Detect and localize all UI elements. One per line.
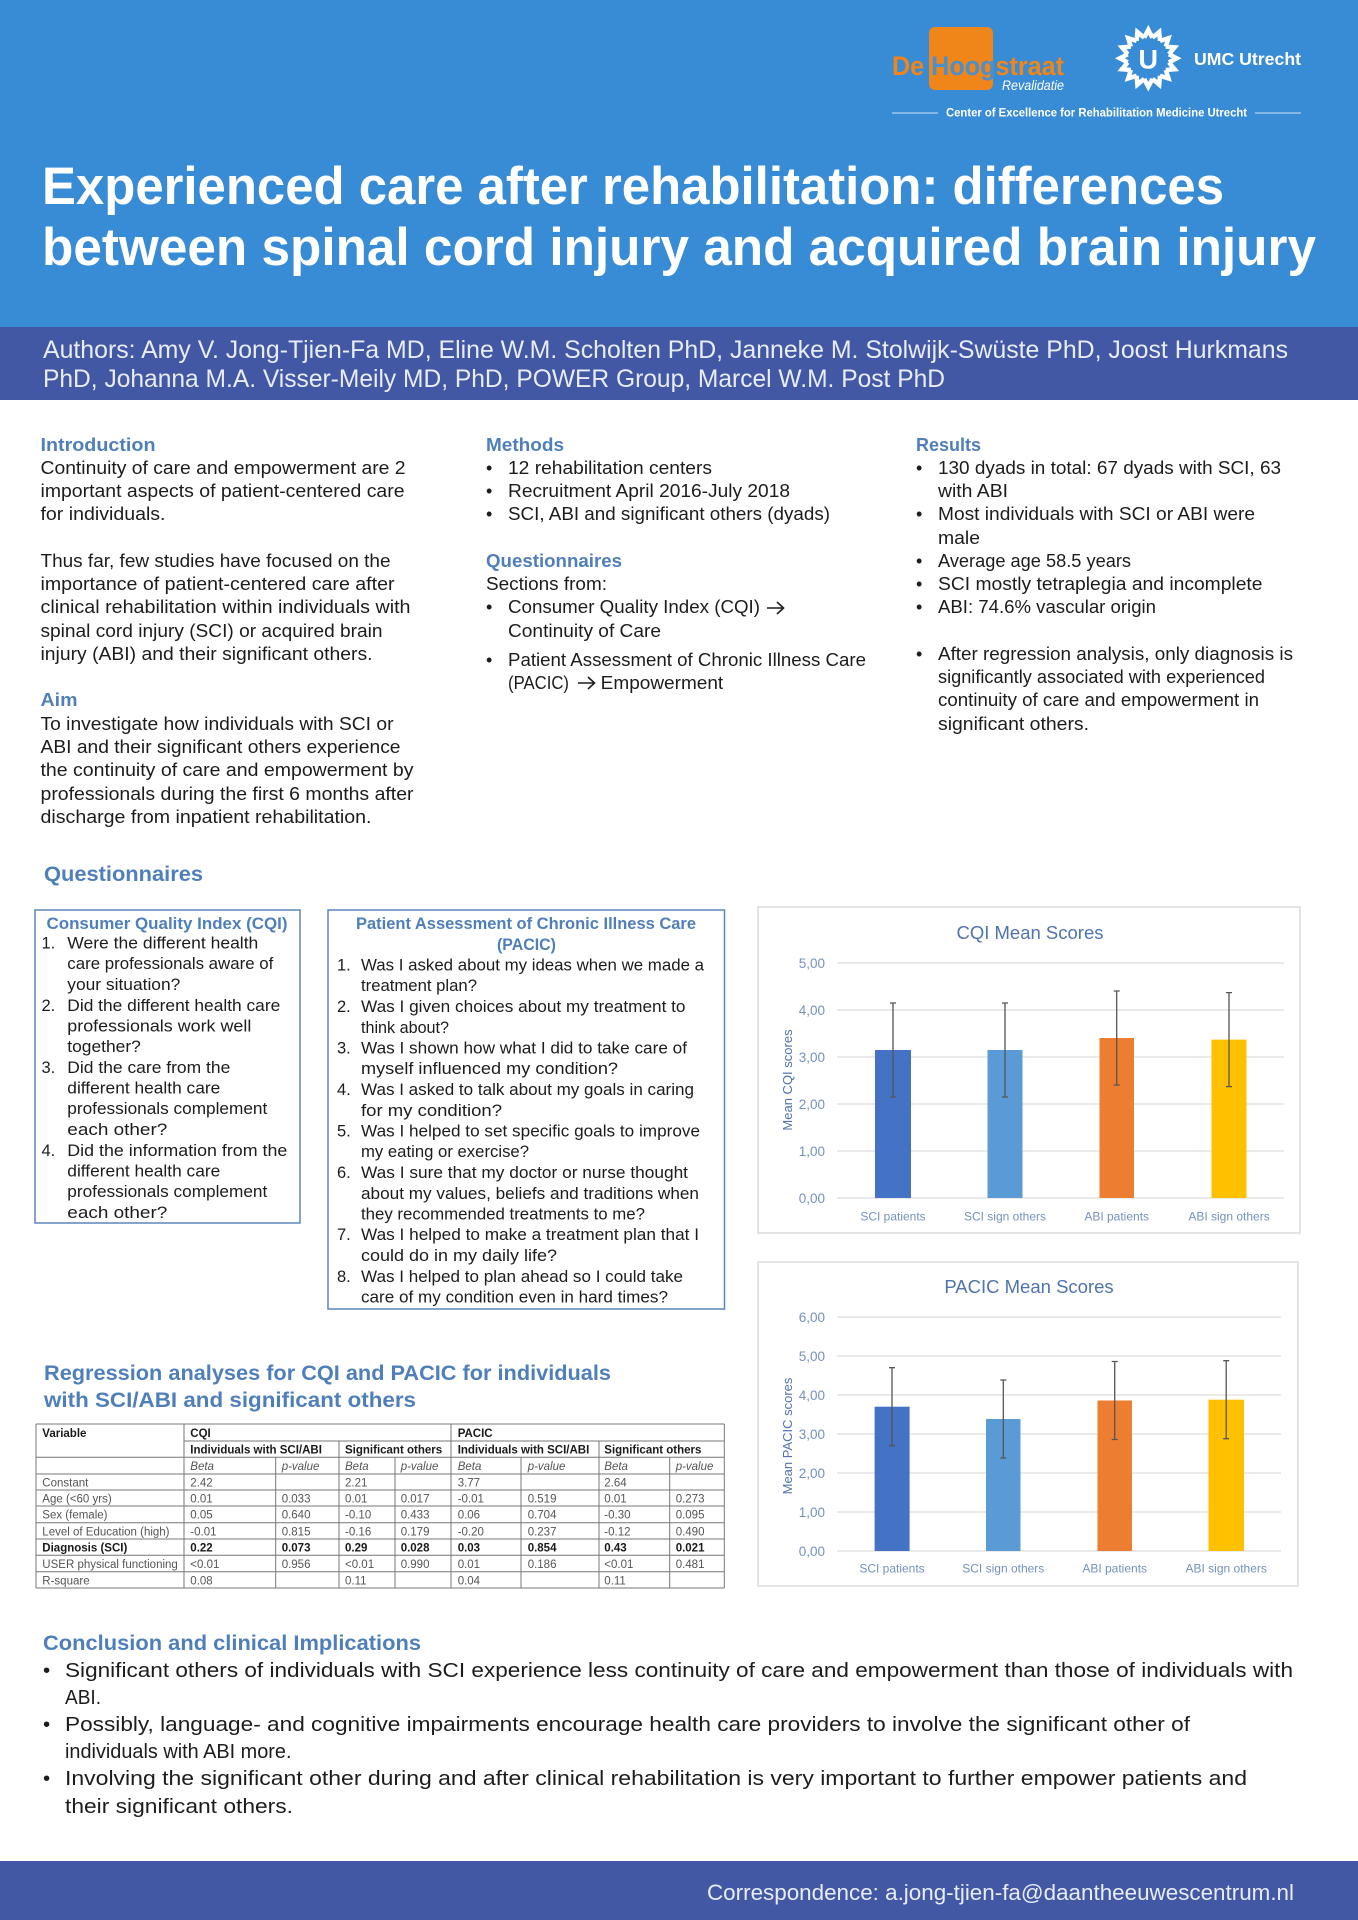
heading: CQI: Consumer Quality Index (CQI) <box>46 915 288 933</box>
chart: CQI mean scores: 1,00 <box>799 1144 825 1159</box>
chart: CQI mean scores: 5,00 <box>799 956 825 971</box>
table: regression results: p-value <box>527 1461 565 1473</box>
list: conclusions: individuals with ABI more. <box>65 1740 292 1763</box>
text: introduction: Thus far, few studies have focused on the <box>40 551 390 571</box>
list: PACIC items: 4. <box>337 1081 351 1099</box>
table: regression results: 2.64 <box>604 1477 627 1489</box>
list: PACIC items: 5. <box>337 1122 351 1140</box>
table: regression results: -0.10 <box>345 1510 371 1522</box>
list: methods: • <box>486 458 492 478</box>
table: regression results: R-square <box>42 1575 90 1587</box>
list: results <box>916 458 1293 734</box>
table: regression results: 0.481 <box>676 1559 704 1571</box>
table: regression results: 0.033 <box>282 1494 310 1506</box>
list: CQI items: 4. <box>42 1142 55 1160</box>
logo: De Hoogstraat: Revalidatie <box>1002 77 1064 93</box>
chart: CQI mean scores: CQI Mean Scores <box>956 922 1104 943</box>
table: regression results: p-value <box>675 1461 713 1473</box>
list: CQI items: each other? <box>67 1121 167 1139</box>
table: regression results: Age (<60 yrs) <box>42 1494 112 1506</box>
text: aim: ABI and their significant others experience <box>40 737 400 757</box>
heading: questionnaires section: Questionnaires <box>44 863 203 886</box>
list: conclusions <box>43 1659 1293 1818</box>
chart: PACIC mean scores: 4,00 <box>799 1388 825 1403</box>
list: CQI items: each other? <box>67 1204 167 1222</box>
chart: CQI mean scores: 0,00 <box>799 1191 825 1206</box>
list: results: • <box>916 458 922 478</box>
text: introduction: injury (ABI) and their significant others. <box>40 644 372 664</box>
list: methods: • <box>486 504 492 524</box>
list: PACIC items: Was I asked about my ideas when we made a <box>361 956 705 974</box>
list: CQI items: Did the different health care <box>67 997 280 1015</box>
heading: methods: Methods <box>486 435 564 455</box>
list: CQI items: different health care <box>67 1162 220 1180</box>
table: regression results: p-value <box>281 1461 319 1473</box>
chart: CQI mean scores: Mean CQI scores <box>780 1029 795 1131</box>
list: PACIC items: Was I sure that my doctor or nurse thought <box>361 1164 688 1182</box>
table: regression results: Variable <box>42 1428 86 1440</box>
table: regression results: 2.21 <box>345 1477 367 1489</box>
text: aim: the continuity of care and empowerment by <box>40 760 413 780</box>
chart: CQI mean scores: ABI sign others <box>1188 1210 1270 1224</box>
list: PACIC items: for my condition? <box>361 1102 502 1120</box>
table: regression results: 0.179 <box>401 1526 429 1538</box>
authors band: PhD, Johanna M.A. Visser-Meily MD, PhD, POWER Group, Marcel W.M. Post PhD <box>43 365 945 393</box>
table: regression results: 0.01 <box>604 1494 627 1506</box>
title: between spinal cord injury and acquired brain injury <box>42 218 1317 277</box>
table: regression results: -0.16 <box>345 1526 371 1538</box>
list: results: Most individuals with SCI or ABI were <box>938 504 1255 524</box>
table: regression results: 0.017 <box>401 1494 429 1506</box>
list: PACIC items: Was I asked to talk about my goals in caring <box>361 1081 694 1099</box>
list: results: significantly associated with experienced <box>938 667 1265 687</box>
table: regression results: 0.22 <box>190 1543 213 1555</box>
chart: PACIC mean scores: 2,00 <box>799 1466 825 1481</box>
list: CQI items: 1. <box>42 934 55 952</box>
logo: UMC Utrecht: U <box>1139 44 1158 74</box>
logo: UMC Utrecht <box>1120 30 1301 87</box>
heading: introduction: Introduction <box>40 435 156 455</box>
list: PACIC items: Was I shown how what I did to take care of <box>361 1040 687 1058</box>
list: CQI items: your situation? <box>67 976 180 994</box>
authors band <box>0 327 1358 400</box>
table: regression results: Individuals with SCI/ABI <box>458 1445 589 1457</box>
table: regression results: 0.490 <box>676 1526 704 1538</box>
table: regression results: 0.43 <box>604 1543 627 1555</box>
table: regression results: <0.01 <box>190 1559 219 1571</box>
panel: PACIC questions <box>328 910 724 1309</box>
list: questionnaire sections: • <box>486 597 492 617</box>
table: regression results: Diagnosis (SCI) <box>42 1543 127 1555</box>
text: introduction: spinal cord injury (SCI) or acquired brain <box>40 621 382 641</box>
table: regression results: Beta <box>458 1461 481 1473</box>
heading: PACIC: Patient Assessment of Chronic Illness Care <box>356 915 696 933</box>
panel: introduction and aim <box>40 435 414 827</box>
table: regression results: Beta <box>190 1461 214 1473</box>
list: PACIC items: think about? <box>361 1019 449 1037</box>
list: results: • <box>916 644 922 664</box>
text: introduction: clinical rehabilitation within individuals with <box>40 597 411 617</box>
text: aim <box>40 714 414 827</box>
table: regression results: Significant others <box>345 1445 442 1457</box>
table: regression results: CQI <box>190 1428 211 1440</box>
list: PACIC items: Was I helped to make a treatment plan that I <box>361 1226 699 1244</box>
list: questionnaire sections: Sections from: <box>486 574 607 594</box>
chart: PACIC mean scores: ABI patients <box>1082 1562 1147 1576</box>
table: regression results: <0.01 <box>604 1559 633 1571</box>
text: introduction: important aspects of patient-centered care <box>40 481 404 501</box>
chart: CQI mean scores <box>758 907 1300 1233</box>
list: CQI items <box>42 934 287 1222</box>
table: regression results: 0.06 <box>458 1510 480 1522</box>
chart: CQI mean scores: 2,00 <box>799 1097 825 1112</box>
list: PACIC items <box>337 956 705 1306</box>
heading: regression analyses <box>43 1362 611 1412</box>
list: PACIC items: 2. <box>337 998 351 1016</box>
list: PACIC items: Was I given choices about my treatment to <box>361 998 686 1016</box>
chart: CQI mean scores: SCI patients <box>860 1210 926 1224</box>
list: CQI items: 2. <box>42 997 55 1015</box>
panel: conclusion <box>43 1632 1293 1818</box>
chart: CQI mean scores: SCI sign others <box>964 1210 1046 1224</box>
text: introduction: for individuals. <box>40 504 166 524</box>
table: regression results: 0.01 <box>458 1559 480 1571</box>
table: regression results: Significant others <box>604 1445 701 1457</box>
list: results: with ABI <box>937 481 1008 501</box>
table: regression results: 0.273 <box>676 1494 704 1506</box>
text: introduction <box>40 458 411 664</box>
table: regression results: 0.05 <box>190 1510 213 1522</box>
list: results: continuity of care and empowerment in <box>938 690 1259 710</box>
list: questionnaire sections: Consumer Quality Index (CQI) <box>508 597 760 617</box>
table: regression results: 0.01 <box>345 1494 367 1506</box>
heading: results: Results <box>916 435 981 455</box>
text: introduction: Continuity of care and empowerment are 2 <box>40 458 406 478</box>
table: regression results: 0.021 <box>676 1543 705 1555</box>
heading: PACIC <box>356 915 696 954</box>
text: introduction: importance of patient-centered care after <box>40 574 395 594</box>
table: regression results: 3.77 <box>458 1477 480 1489</box>
chart: PACIC mean scores: PACIC Mean Scores <box>944 1276 1114 1297</box>
table: regression results: 0.854 <box>528 1543 557 1555</box>
table: regression results: 0.03 <box>458 1543 480 1555</box>
table: regression results: 0.186 <box>528 1559 556 1571</box>
chart: PACIC mean scores: 6,00 <box>799 1310 825 1325</box>
table: regression results: 0.095 <box>676 1510 704 1522</box>
list: PACIC items: 7. <box>337 1226 351 1244</box>
chart: PACIC mean scores: SCI patients <box>859 1562 925 1576</box>
list: results: • <box>916 504 922 524</box>
table: regression results: 0.29 <box>345 1543 367 1555</box>
heading: conclusion: Conclusion and clinical Implications <box>43 1632 421 1655</box>
list: conclusions: • <box>43 1659 50 1682</box>
list: results: Average age 58.5 years <box>938 551 1131 571</box>
list: CQI items: Did the care from the <box>67 1059 230 1077</box>
table: regression results: 0.815 <box>282 1526 310 1538</box>
list: PACIC items: 6. <box>337 1164 351 1182</box>
list: results: • <box>916 551 922 571</box>
table: regression results: -0.20 <box>458 1526 484 1538</box>
footer: correspondence: Correspondence: a.jong-tjien-fa@daantheeuwescentrum.nl <box>707 1880 1294 1905</box>
chart: PACIC mean scores: 0,00 <box>799 1544 825 1559</box>
table: regression results: Beta <box>345 1461 369 1473</box>
chart: CQI mean scores: 4,00 <box>799 1003 825 1018</box>
chart: PACIC mean scores: SCI sign others <box>962 1562 1044 1576</box>
arrow: PACIC to empowerment <box>578 677 594 689</box>
panel: CQI questions <box>35 910 300 1223</box>
list: methods <box>486 458 830 524</box>
list: PACIC items: Was I helped to set specific goals to improve <box>361 1122 700 1140</box>
chart: CQI mean scores: 3,00 <box>799 1050 825 1065</box>
heading: regression analyses: Regression analyses for CQI and PACIC for individuals <box>44 1362 611 1385</box>
list: results: significant others. <box>938 714 1089 734</box>
table: regression results: -0.30 <box>604 1510 631 1522</box>
text: aim: To investigate how individuals with SCI or <box>40 714 393 734</box>
table: regression results: 0.01 <box>190 1494 213 1506</box>
table: regression results: Individuals with SCI/ABI <box>190 1445 322 1457</box>
panel: results <box>916 435 1293 734</box>
list: questionnaire sections: Patient Assessment of Chronic Illness Care <box>508 650 866 670</box>
chart: PACIC mean scores: 3,00 <box>799 1427 825 1442</box>
chart: PACIC mean scores <box>758 1262 1298 1586</box>
table: regression results: 0.028 <box>401 1543 430 1555</box>
list: PACIC items: about my values, beliefs and traditions when <box>361 1185 699 1203</box>
table: regression results: PACIC <box>458 1428 493 1440</box>
list: PACIC items: care of my condition even in hard times? <box>361 1288 668 1306</box>
list: PACIC items: myself influenced my condition? <box>361 1060 618 1078</box>
header banner <box>0 0 1358 327</box>
table: regression results: 0.704 <box>528 1510 557 1522</box>
table: regression results: 0.04 <box>458 1575 481 1587</box>
list: PACIC items: 1. <box>337 956 351 974</box>
list: results: SCI mostly tetraplegia and incomplete <box>938 574 1262 594</box>
table: regression results: 0.08 <box>190 1575 213 1587</box>
list: methods: Recruitment April 2016-July 2018 <box>508 481 790 501</box>
list: PACIC items: treatment plan? <box>361 977 477 995</box>
list: questionnaire sections: (PACIC) <box>508 673 569 693</box>
text: aim: professionals during the first 6 months after <box>40 784 414 804</box>
list: methods: 12 rehabilitation centers <box>508 458 712 478</box>
list: questionnaire sections <box>486 574 866 693</box>
table: regression results: 0.073 <box>282 1543 310 1555</box>
list: PACIC items: my eating or exercise? <box>361 1143 529 1161</box>
footer: correspondence <box>0 1861 1358 1920</box>
heading: regression analyses: with SCI/ABI and significant others <box>43 1389 416 1412</box>
panel: methods <box>486 435 866 693</box>
table: regression results: p-value <box>400 1461 438 1473</box>
table: regression results: 0.519 <box>528 1494 556 1506</box>
table: regression results: 0.640 <box>282 1510 310 1522</box>
table: regression results: 0.956 <box>282 1559 310 1571</box>
table: regression results: Level of Education (high) <box>42 1526 170 1538</box>
authors band: Authors: Amy V. Jong-Tjien-Fa MD, Eline W.M. Scholten PhD, Janneke M. Stolwijk-Swüste PhD, Joost Hurkmans <box>43 336 1288 364</box>
list: CQI items: care professionals aware of <box>67 955 274 973</box>
chart: PACIC mean scores: ABI sign others <box>1186 1562 1267 1576</box>
table: regression results: Constant <box>42 1477 89 1489</box>
list: PACIC items: 3. <box>337 1040 351 1058</box>
heading: questionnaires: Questionnaires <box>486 551 622 571</box>
list: CQI items: professionals complement <box>67 1100 268 1118</box>
chart: PACIC mean scores: Mean PACIC scores <box>780 1377 795 1494</box>
table: regression results: Beta <box>604 1461 628 1473</box>
table: regression results: -0.01 <box>458 1494 484 1506</box>
logo: UMC Utrecht: UMC Utrecht <box>1194 49 1301 69</box>
list: questionnaire sections: Empowerment <box>601 673 723 693</box>
title <box>42 157 1317 277</box>
list: results: ABI: 74.6% vascular origin <box>938 597 1156 617</box>
chart: PACIC mean scores: 1,00 <box>799 1505 825 1520</box>
logo: De Hoogstraat <box>892 27 1064 93</box>
chart: CQI mean scores: ABI patients <box>1084 1210 1149 1224</box>
text: aim: discharge from inpatient rehabilitation. <box>40 807 372 827</box>
title: Experienced care after rehabilitation: differences <box>42 157 1224 216</box>
list: results: male <box>938 528 980 548</box>
list: CQI items: different health care <box>67 1080 220 1098</box>
list: results: After regression analysis, only diagnosis is <box>938 644 1293 664</box>
table: regression results: -0.12 <box>604 1526 631 1538</box>
list: PACIC items: could do in my daily life? <box>361 1247 557 1265</box>
list: CQI items: professionals complement <box>67 1183 268 1201</box>
list: methods: • <box>486 481 492 501</box>
list: PACIC items: they recommended treatments to me? <box>361 1206 645 1224</box>
list: conclusions: • <box>43 1713 50 1736</box>
table: regression results: 0.990 <box>401 1559 429 1571</box>
table: regression results: Sex (female) <box>42 1510 108 1522</box>
list: CQI items: Were the different health <box>67 934 258 952</box>
heading: aim: Aim <box>40 690 78 710</box>
heading: PACIC: (PACIC) <box>497 936 556 954</box>
table: regression results <box>36 1424 724 1588</box>
list: conclusions: Possibly, language- and cognitive impairments encourage health care providers to involve the significant other of <box>65 1713 1190 1736</box>
list: conclusions: Significant others of individuals with SCI experience less continuity of care and empowerment than those of individuals with <box>65 1659 1293 1682</box>
logo: De Hoogstraat: De Hoogstraat <box>892 51 1064 81</box>
arrow: CQI to continuity of care <box>767 602 784 614</box>
list: CQI items: professionals work well <box>67 1018 251 1036</box>
list: conclusions: Involving the significant other during and after clinical rehabilitation is very important to further empower patients and <box>65 1767 1247 1790</box>
list: conclusions: their significant others. <box>65 1795 293 1818</box>
list: results: 130 dyads in total: 67 dyads with SCI, 63 <box>938 458 1281 478</box>
list: questionnaire sections: Continuity of Care <box>508 621 661 641</box>
table: regression results: 0.237 <box>528 1526 556 1538</box>
list: CQI items: together? <box>67 1038 141 1056</box>
list: CQI items: 3. <box>42 1059 55 1077</box>
list: questionnaire sections: • <box>486 650 492 670</box>
list: results: • <box>916 597 922 617</box>
table: regression results: -0.01 <box>190 1526 217 1538</box>
list: conclusions: • <box>43 1767 50 1790</box>
list: PACIC items: Was I helped to plan ahead so I could take <box>361 1268 683 1286</box>
list: results: • <box>916 574 922 594</box>
affiliation line: Center of Excellence for Rehabilitation Medicine Utrecht <box>946 108 1247 120</box>
table: regression results: 0.433 <box>401 1510 429 1522</box>
table: regression results: USER physical functioning <box>42 1559 178 1571</box>
table: regression results: <0.01 <box>345 1559 374 1571</box>
table: regression results: 2.42 <box>190 1477 213 1489</box>
list: PACIC items: 8. <box>337 1268 351 1286</box>
list: CQI items: Did the information from the <box>67 1142 287 1160</box>
table: regression results: 0.11 <box>604 1575 626 1587</box>
list: methods: SCI, ABI and significant others (dyads) <box>508 504 830 524</box>
list: conclusions: ABI. <box>65 1686 101 1709</box>
table: regression results: 0.11 <box>345 1575 367 1587</box>
chart: PACIC mean scores: 5,00 <box>799 1349 825 1364</box>
